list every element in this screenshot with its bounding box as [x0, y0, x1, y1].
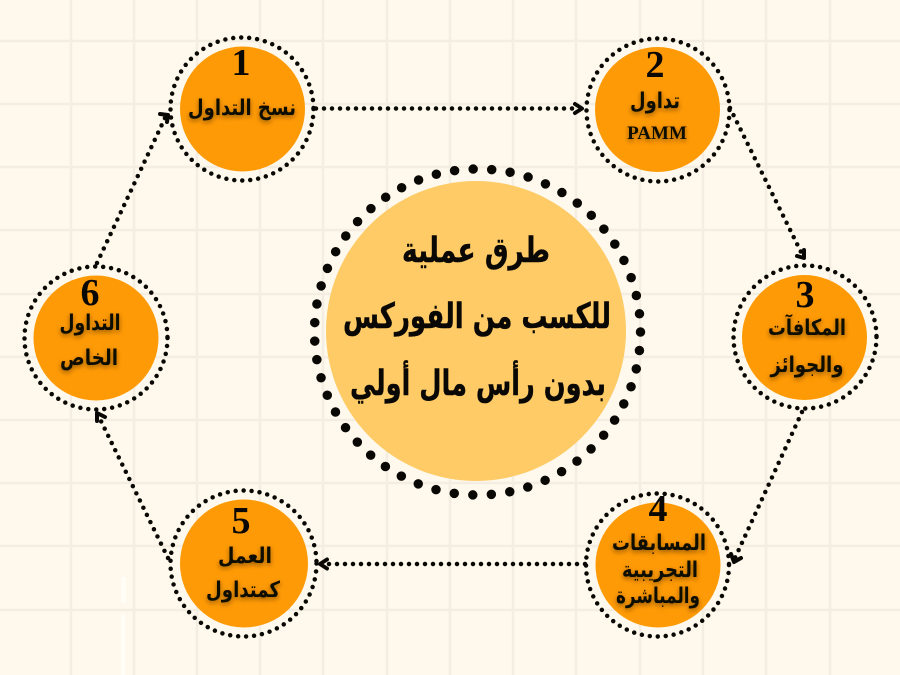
arrow: 3 to 4 [731, 412, 802, 562]
number 3: 3 [796, 274, 814, 316]
label 6 [60, 311, 120, 371]
central title: طرق عملية [402, 231, 550, 271]
label 5: العمل [218, 544, 272, 569]
number 2: 2 [646, 44, 664, 86]
central title: للكسب من الفوركس [343, 297, 611, 337]
arrow: 2 to 3 [730, 108, 804, 258]
label 6: الخاص [60, 346, 118, 371]
node 5: work as a trader [170, 490, 316, 636]
number 4: 4 [648, 488, 668, 530]
number 5: 5 [232, 500, 250, 542]
arrow: 5 to 6 [97, 413, 168, 558]
arrow: 4 to 5 [320, 560, 585, 568]
label 6: التداول [60, 311, 120, 336]
label 4: والمباشرة [616, 584, 700, 609]
arrow: 6 to 1 [97, 114, 168, 263]
label 5: كمتداول [206, 578, 280, 603]
node 1: copy trading [170, 38, 314, 180]
label 5 [206, 544, 280, 603]
node 6: private trading [24, 266, 168, 410]
label 2 [627, 89, 687, 144]
label 2: تداول [630, 89, 680, 114]
node 2: PAMM trading [586, 38, 730, 182]
central circle [314, 169, 640, 495]
label 3 [768, 313, 846, 378]
label 2: PAMM [627, 123, 687, 144]
node 3: rewards and prizes [734, 266, 876, 408]
number 6: 6 [80, 272, 100, 314]
label 3: المكافآت [768, 313, 846, 341]
central title: بدون رأس مال أولي [350, 360, 606, 404]
number 1: 1 [232, 42, 250, 84]
label 1: نسخ التداول [188, 96, 296, 121]
label 4: المسابقات [612, 531, 706, 556]
node 4: demo and live contests [586, 488, 729, 636]
label 4 [612, 531, 706, 609]
central title [343, 231, 611, 404]
label 4: التجريبية [622, 558, 698, 583]
arrow: 1 to 2 [316, 104, 582, 113]
label 3: والجوائز [770, 353, 844, 378]
